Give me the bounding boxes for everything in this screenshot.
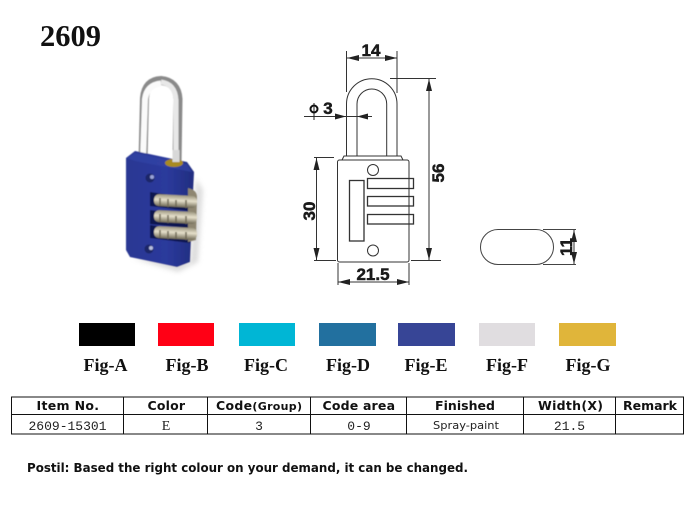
drawing shackle xyxy=(346,79,397,156)
table header row: Remark xyxy=(623,398,678,413)
table header row: Finished xyxy=(435,398,495,413)
swatch: Fig-D xyxy=(319,323,376,375)
table data row: 0-9 xyxy=(347,419,371,434)
technical drawing: shackle cross-section with dimension 11: 11 xyxy=(557,238,576,256)
dimension: phi 3 xyxy=(304,99,372,120)
swatch: Fig-C xyxy=(239,323,295,375)
table header row: Code area xyxy=(322,398,395,413)
dimension: 21.5 xyxy=(338,263,409,285)
table data row: Spray-paint xyxy=(433,419,500,432)
dimension: 56: 56 xyxy=(429,164,448,182)
table data row: 2609-15301 xyxy=(28,419,107,434)
swatch: Fig-G: Fig-G xyxy=(566,355,610,375)
combination wheels xyxy=(150,188,197,243)
swatch: Fig-B xyxy=(158,323,214,375)
table data row xyxy=(28,419,585,434)
title: 2609 xyxy=(40,19,101,53)
table header row: Color xyxy=(148,398,186,413)
dimension: 14: 14 xyxy=(362,41,381,60)
icon: blue combination padlock photo xyxy=(126,80,203,272)
table grid xyxy=(11,397,684,434)
dimension: 21.5: 21.5 xyxy=(356,265,390,284)
colour swatches xyxy=(79,323,616,375)
dimension: phi 3: 3 xyxy=(323,99,333,118)
dimension: 56 xyxy=(390,78,448,260)
padlock shackle xyxy=(143,80,178,165)
swatch: Fig-C: Fig-C xyxy=(244,355,288,375)
table header row xyxy=(36,398,678,413)
technical drawing: shackle cross-section with dimension 11 xyxy=(480,230,576,264)
table data row: 21.5 xyxy=(554,419,585,434)
swatch: Fig-F: Fig-F xyxy=(486,355,528,375)
table data row: E xyxy=(162,419,170,434)
table header row: Item No. xyxy=(36,398,99,413)
swatch: Fig-E: Fig-E xyxy=(404,355,448,375)
postil note: Postil: Based the right colour on your demand, it can be changed. xyxy=(27,461,468,475)
dimension: 14 xyxy=(346,41,397,93)
drawing body xyxy=(342,156,403,160)
swatch: Fig-A xyxy=(79,323,135,375)
swatch: Fig-D: Fig-D xyxy=(326,355,370,375)
dimension: 30 xyxy=(300,158,336,260)
swatch: Fig-B: Fig-B xyxy=(166,355,208,375)
table header row: Code(Group) xyxy=(216,398,302,413)
table header row: Width(X) xyxy=(538,398,603,413)
swatch: Fig-F xyxy=(479,323,535,375)
swatch: Fig-G xyxy=(559,323,616,375)
dimension: 30: 30 xyxy=(300,202,319,220)
swatch: Fig-E xyxy=(398,323,455,375)
swatch: Fig-A: Fig-A xyxy=(84,355,128,375)
table data row: 3 xyxy=(255,419,263,434)
technical drawing: padlock front view xyxy=(338,79,414,262)
padlock body xyxy=(126,151,194,267)
specification table xyxy=(11,397,684,434)
